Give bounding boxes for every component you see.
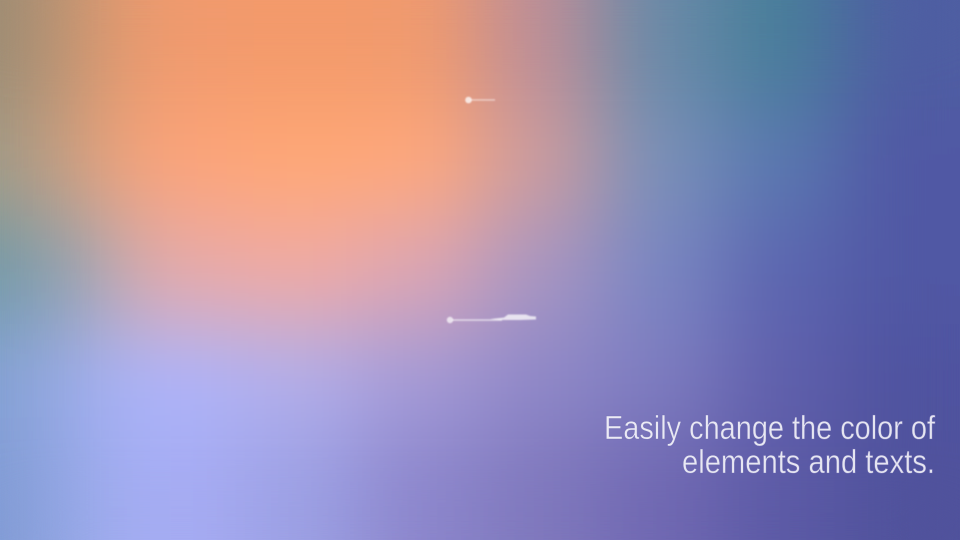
upper light streak with dot [465,97,495,103]
lower light streak with dot [447,314,536,323]
caption text: elements and texts. [682,443,935,480]
caption text [604,409,936,480]
